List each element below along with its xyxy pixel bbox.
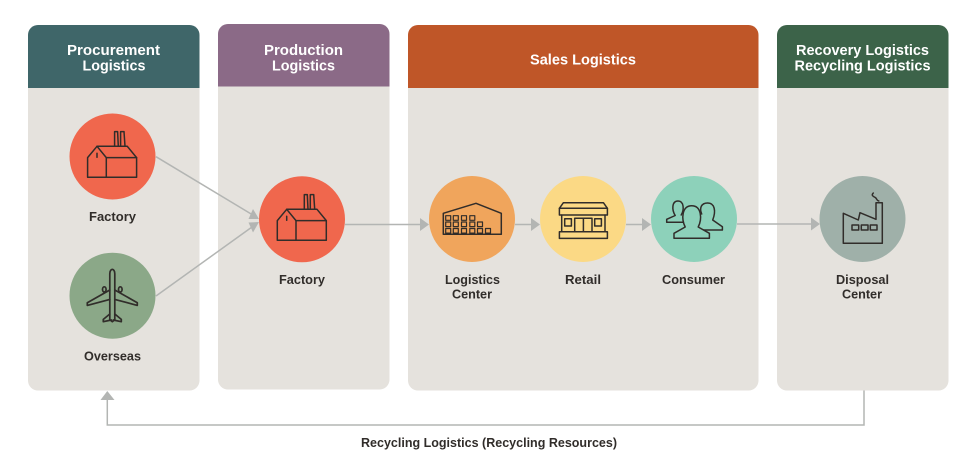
panel: recovery and recycling logistics: [777, 25, 948, 390]
node: production factory: [259, 176, 345, 287]
node: production factory: Factory: [279, 273, 325, 287]
node: overseas: Overseas: [84, 350, 141, 364]
heading: production logistics: Production: [264, 43, 343, 59]
node: disposal center: Disposal: [836, 273, 889, 287]
arrow: production factory to logistics center: [345, 218, 429, 231]
node: retail: Retail: [565, 273, 601, 287]
heading: recovery and recycling logistics: Recovery Logistics: [796, 43, 929, 59]
arrow: retail to consumer: [626, 218, 651, 231]
panel: sales logistics: [408, 25, 758, 390]
node: factory: Factory: [89, 210, 136, 224]
heading: production logistics: Logistics: [272, 58, 335, 74]
node: disposal center: [820, 176, 906, 302]
heading: procurement logistics: Procurement: [67, 43, 160, 59]
caption: recycling logistics: Recycling Logistics (Recycling Resources): [361, 436, 617, 450]
node: overseas: [70, 253, 156, 364]
arrow: logistics center to retail: [515, 218, 540, 231]
node: retail: [540, 176, 626, 287]
node: disposal center: Center: [842, 288, 882, 302]
node: logistics center: Logistics: [445, 273, 500, 287]
heading: recovery and recycling logistics: Recycling Logistics: [794, 58, 930, 74]
panel: production logistics: [218, 24, 390, 390]
heading: sales logistics: Sales Logistics: [530, 52, 636, 68]
arrow: consumer to disposal center: [737, 218, 820, 230]
panel: procurement logistics: [28, 25, 200, 390]
heading: procurement logistics: Logistics: [82, 58, 146, 74]
node: consumer: Consumer: [662, 273, 725, 287]
node: factory: [70, 114, 156, 224]
arrow: procurement factory to production factory: [156, 157, 259, 219]
heading: procurement logistics: [28, 25, 200, 88]
heading: production logistics: [218, 24, 390, 86]
heading: recovery and recycling logistics: [777, 25, 948, 88]
node: logistics center: [429, 176, 515, 302]
arrow: overseas to production factory: [156, 222, 259, 296]
arrow: recycling loop back to procurement: [100, 390, 864, 425]
node: logistics center: Center: [452, 288, 492, 302]
heading: sales logistics: [408, 25, 758, 88]
node: consumer: [651, 176, 737, 287]
